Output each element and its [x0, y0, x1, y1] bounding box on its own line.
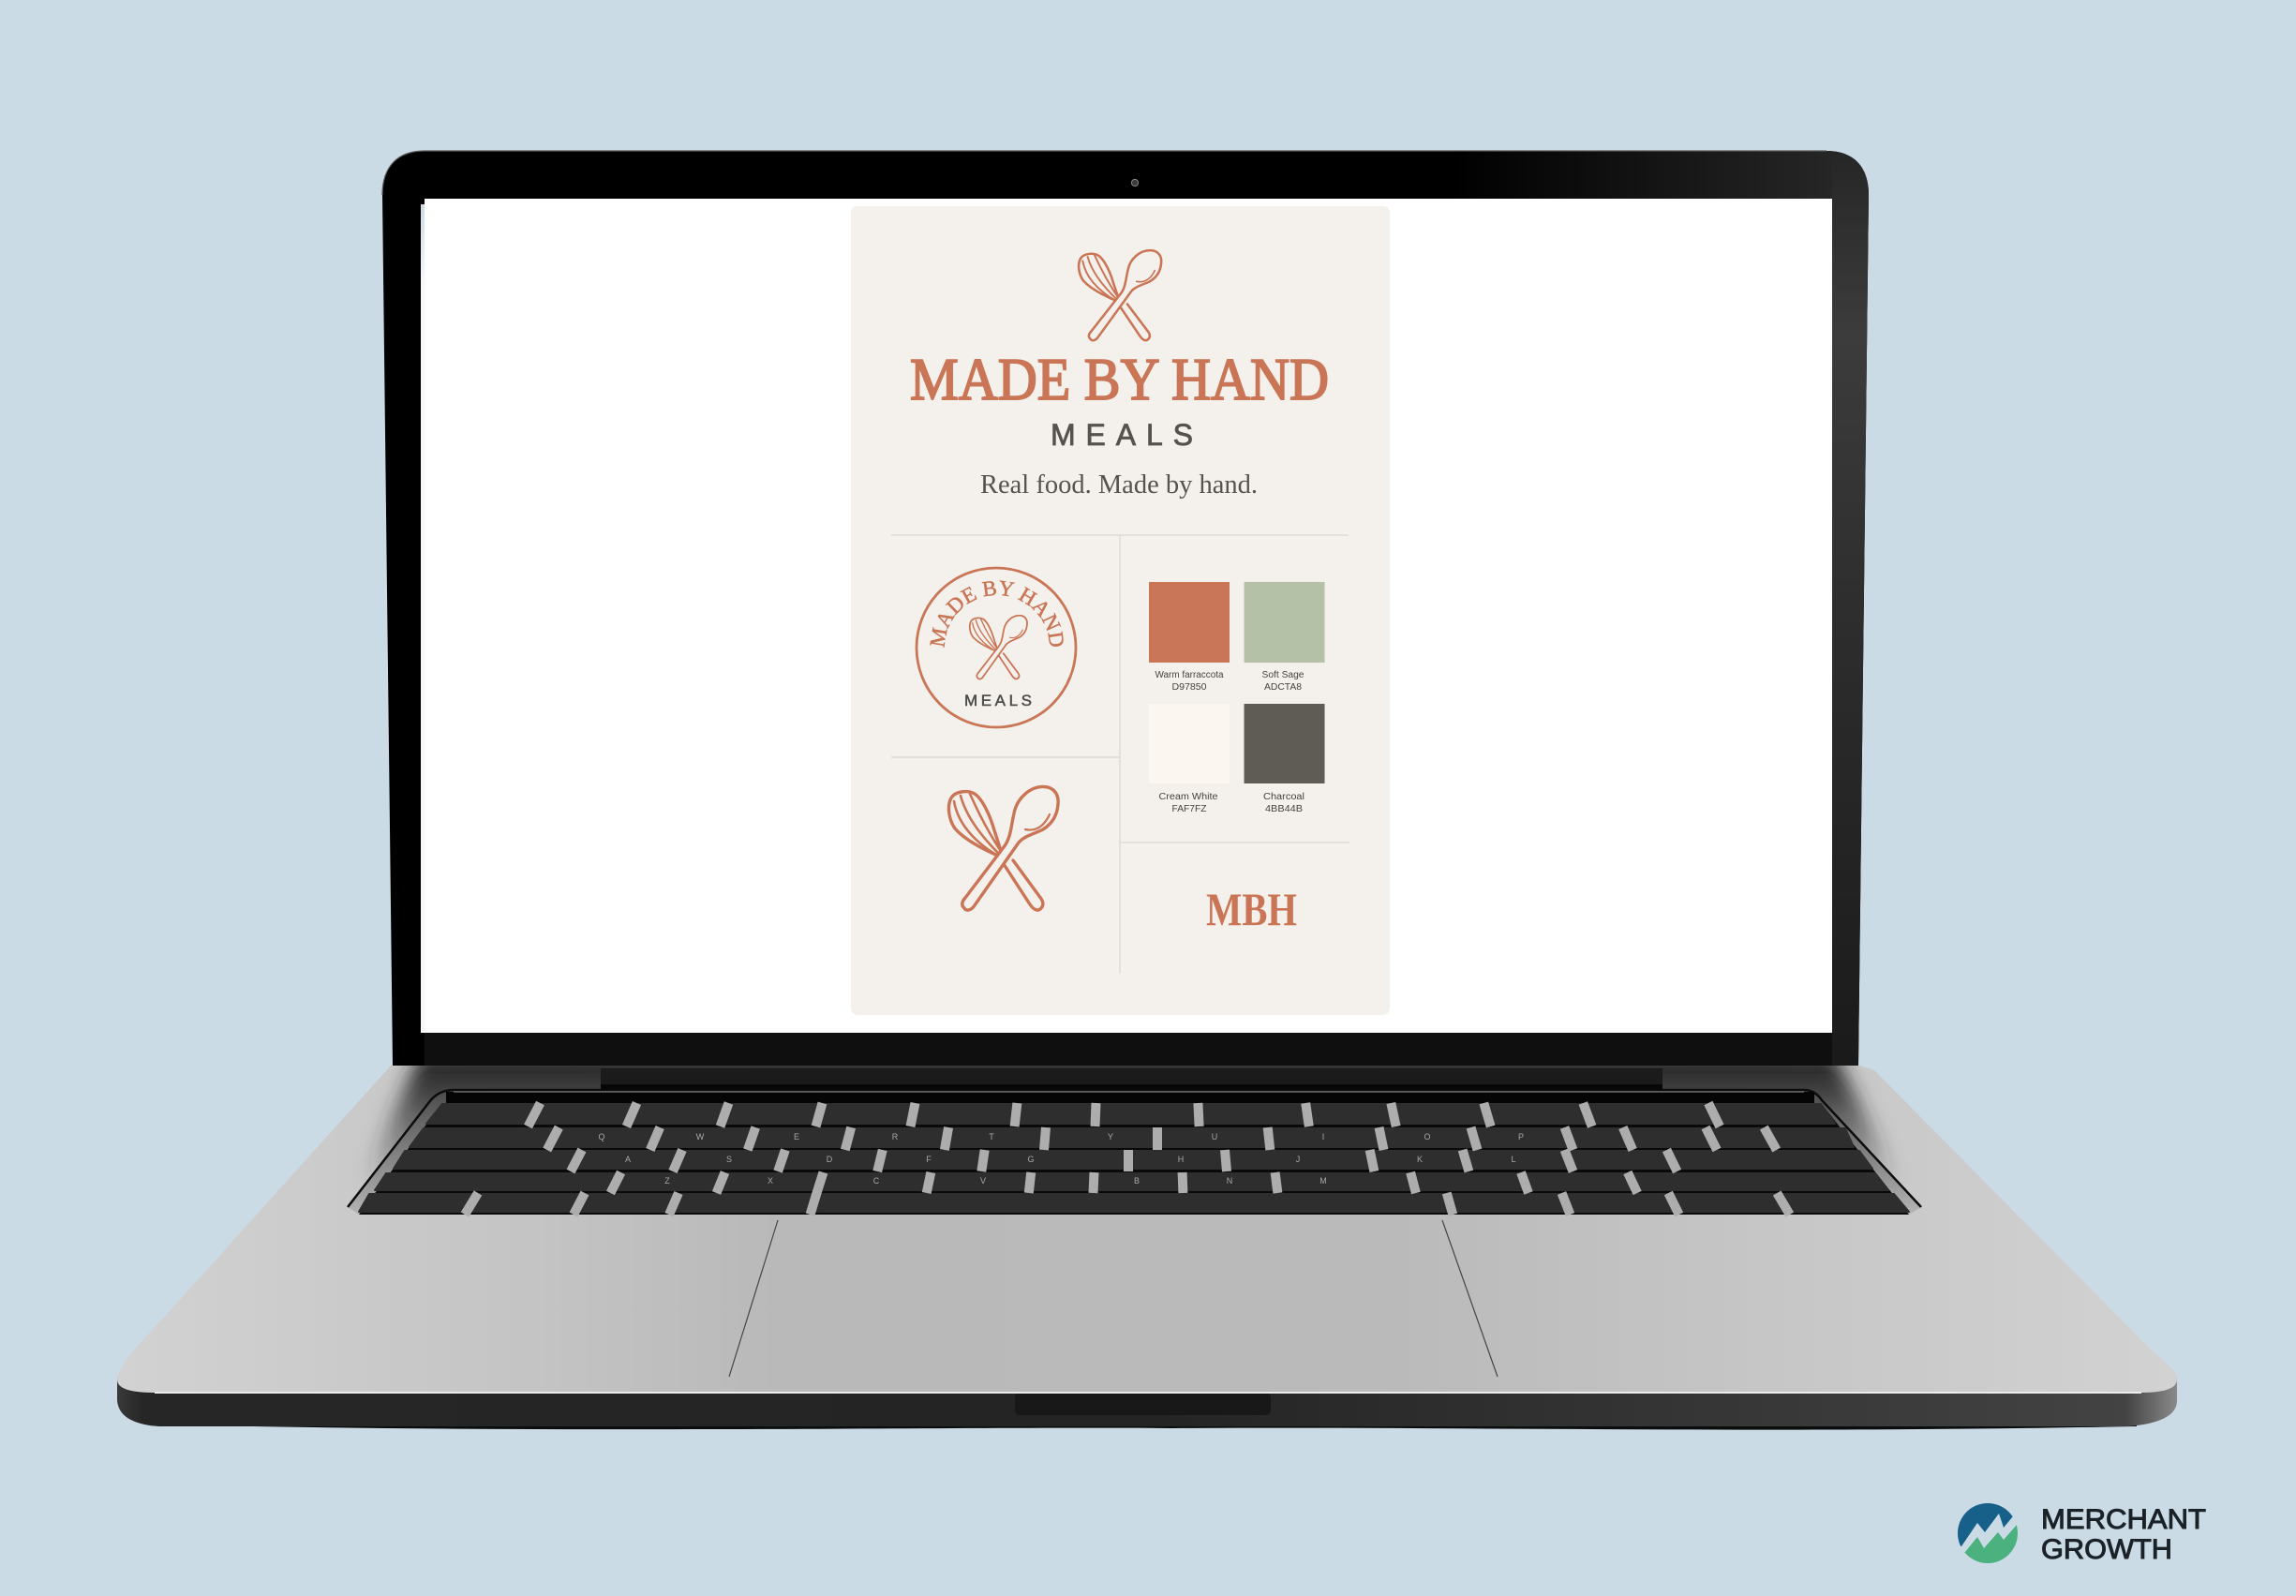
large whisk and spoon icon — [948, 786, 1058, 910]
laptop base lip — [117, 1378, 2177, 1430]
swatch: cream white: Cream White — [1158, 792, 1218, 802]
laptop lid — [382, 151, 1874, 1066]
keyboard keys: X — [768, 1176, 773, 1186]
circular badge logo: MADE BY HAND — [930, 580, 1064, 649]
logo wordmark: MERCHANT — [2041, 1504, 2206, 1535]
primary logo icon: whisk and spoon — [1079, 250, 1161, 340]
logo wordmark — [2041, 1504, 2206, 1565]
keyboard keys: K — [1417, 1155, 1423, 1164]
title: MADE BY HAND — [910, 346, 1329, 412]
Merchant Growth logo — [1958, 1503, 2206, 1563]
keyboard keys: G — [1027, 1155, 1035, 1164]
swatch: soft sage: ADCTA8 — [1264, 682, 1302, 693]
keyboard keys: A — [625, 1155, 631, 1164]
logo wordmark: GROWTH — [2041, 1534, 2172, 1565]
swatch: warm terracotta: D97850 — [1171, 682, 1207, 693]
swatch: warm terracotta — [1149, 582, 1230, 693]
swatch: soft sage — [1245, 582, 1325, 693]
subtitle: MEALS — [1051, 418, 1193, 452]
card dividers — [891, 535, 1349, 974]
brand board card — [851, 206, 1390, 1015]
keyboard keys: P — [1518, 1132, 1524, 1141]
laptop — [117, 151, 2177, 1430]
keyboard keys: V — [980, 1176, 986, 1186]
keyboard keys: S — [726, 1155, 732, 1164]
keyboard keys: L — [1511, 1155, 1516, 1164]
circular badge logo — [915, 566, 1078, 729]
swatch: cream white: FAF7FZ — [1171, 804, 1207, 814]
monogram: MBH — [1206, 883, 1297, 935]
laptop base deck — [117, 1054, 2177, 1393]
keyboard keys: O — [1424, 1132, 1431, 1141]
keyboard keys: R — [892, 1132, 899, 1141]
swatch: charcoal — [1245, 704, 1325, 814]
keyboard keys: B — [1134, 1176, 1140, 1186]
keyboard well — [348, 1068, 1921, 1215]
swatch: cream white — [1149, 704, 1230, 814]
keyboard keys: C — [873, 1176, 880, 1186]
keyboard keys: H — [1178, 1155, 1184, 1164]
swatch: soft sage: Soft Sage — [1261, 670, 1305, 680]
keyboard keys: Z — [664, 1176, 670, 1186]
keyboard keys: D — [827, 1155, 833, 1164]
tagline: Real food. Made by hand. — [980, 470, 1258, 500]
keyboard keys: T — [989, 1132, 994, 1141]
colour swatches — [1149, 582, 1325, 814]
keyboard keys: Y — [1108, 1132, 1113, 1141]
keyboard keys: F — [926, 1155, 932, 1164]
swatch: charcoal: Charcoal — [1263, 792, 1305, 802]
keyboard keys: N — [1227, 1176, 1232, 1186]
screen — [421, 199, 1832, 1033]
circular badge logo: MEALS — [964, 692, 1032, 709]
keyboard keys: U — [1212, 1132, 1217, 1141]
keyboard keys: W — [696, 1132, 705, 1141]
logo mark — [1958, 1503, 2018, 1563]
trackpad edges — [729, 1220, 1498, 1377]
keyboard keys: Q — [598, 1132, 605, 1141]
keyboard keys: J — [1296, 1155, 1300, 1164]
keyboard keys: I — [1322, 1132, 1324, 1141]
webcam — [1131, 179, 1139, 186]
swatch: charcoal: 4BB44B — [1265, 804, 1303, 814]
keyboard keys: M — [1319, 1176, 1327, 1186]
keyboard keys: E — [794, 1132, 799, 1141]
swatch: warm terracotta: Warm farraccota — [1155, 670, 1224, 680]
keyboard keys — [359, 1103, 1909, 1215]
